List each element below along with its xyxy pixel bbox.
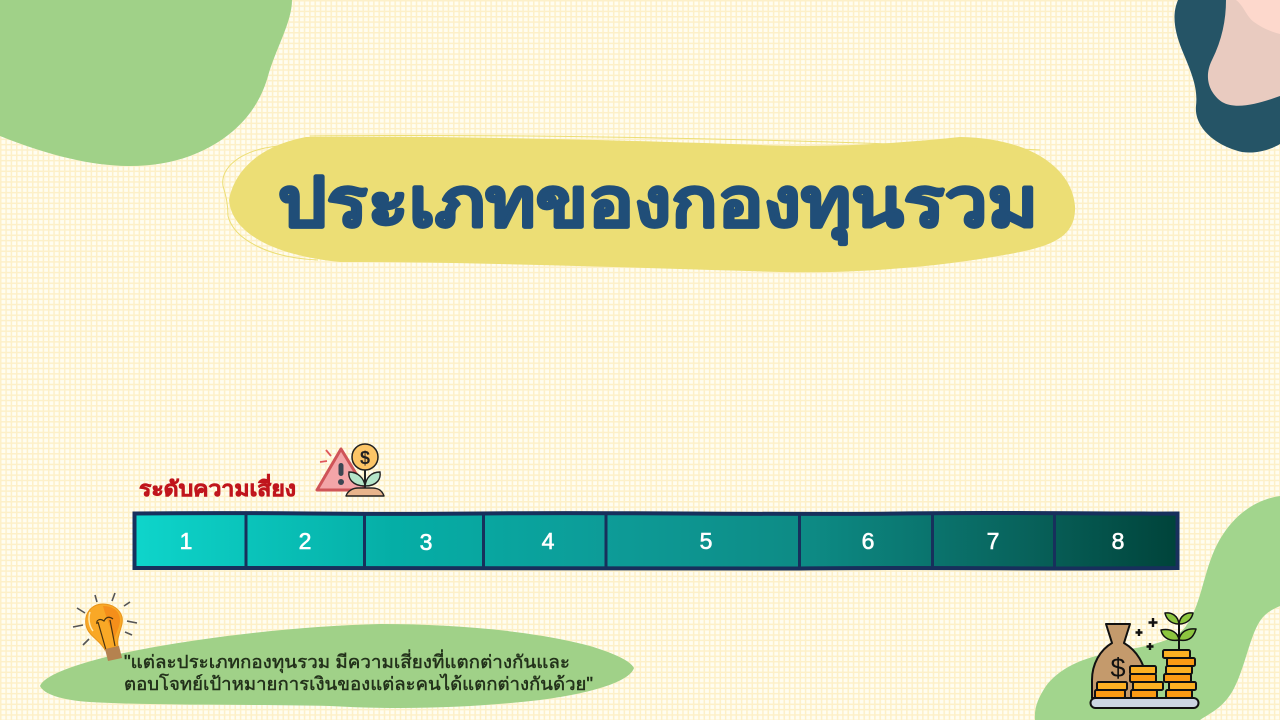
icon: risk warning with plant	[317, 444, 384, 496]
quote text: ตอบโจทย์เป้าหมายการเงินของแต่ละคนได้แตกต่างกันด้วย"	[124, 673, 593, 694]
risk level numbers: 7	[987, 528, 999, 554]
quote text	[124, 649, 593, 694]
icon: light bulb	[73, 593, 137, 661]
risk level numbers: 5	[700, 528, 712, 554]
blob: top-left green	[0, 0, 292, 166]
risk level numbers: 8	[1112, 528, 1124, 554]
blob: top-right teal and peach	[1175, 0, 1280, 153]
risk level numbers	[180, 528, 1124, 555]
blob: quote green brush	[40, 624, 634, 708]
risk level numbers: 6	[862, 528, 874, 554]
heading: risk level: ระดับความเสี่ยง	[139, 473, 296, 501]
risk level numbers: 4	[542, 528, 555, 554]
blob: bottom-right green	[1035, 496, 1280, 720]
risk level numbers: 3	[420, 529, 432, 555]
icon: money bag, coins and sprout	[1090, 613, 1198, 708]
quote text: "แต่ละประเภทกองทุนรวม มีความเสี่ยงที่แตกต่างกันและ	[124, 649, 570, 673]
risk scale bar	[134, 513, 1178, 568]
risk level numbers: 1	[180, 528, 192, 554]
blob: title yellow brush shape	[223, 136, 1075, 272]
icon: risk warning with plant: $	[360, 448, 370, 468]
risk level numbers: 2	[299, 528, 311, 554]
title: ประเภทของกองทุนรวม	[278, 165, 1038, 245]
icon: money bag, coins and sprout: $	[1110, 653, 1126, 683]
